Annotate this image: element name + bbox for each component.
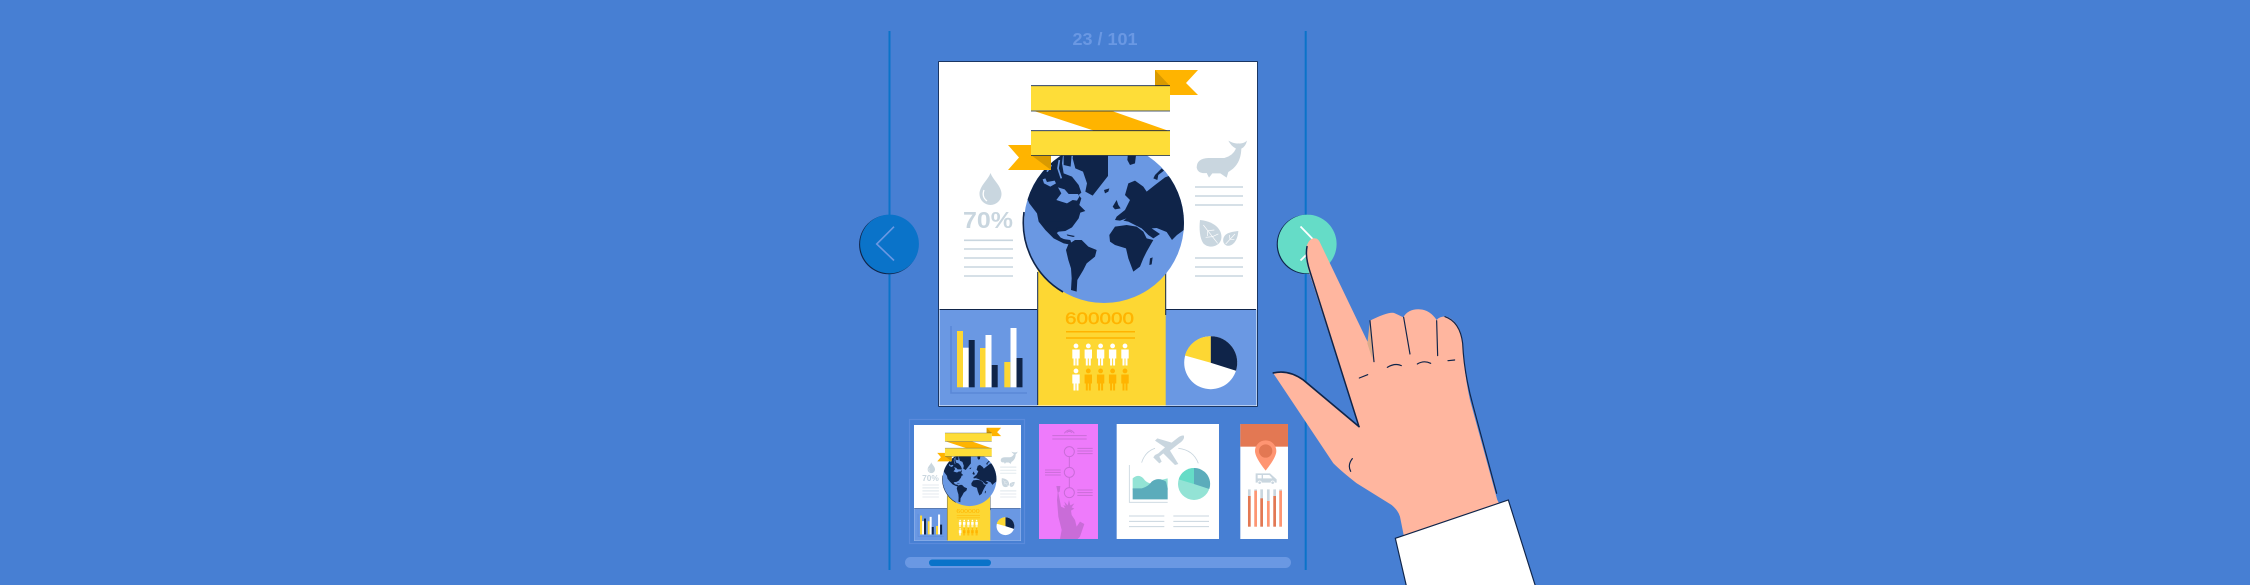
icon: airplane — [1153, 436, 1184, 465]
timeline — [1045, 430, 1093, 498]
icon: whale — [1197, 141, 1247, 178]
icon: map pin — [1255, 440, 1276, 471]
ribbon tail bottom — [1008, 145, 1051, 170]
ribbon band top — [1031, 86, 1170, 110]
left gallery rail — [888, 31, 890, 570]
icon: globe — [1022, 143, 1190, 303]
bar chart — [951, 326, 1027, 393]
south america and africa — [1042, 222, 1153, 292]
flight arcs and axes — [1129, 448, 1198, 502]
thumbnail 2: pink infographic — [1039, 424, 1098, 539]
main card frame — [939, 62, 1257, 406]
button: previous — [859, 215, 919, 274]
panel: yellow column — [1038, 265, 1166, 406]
area chart — [1133, 476, 1168, 499]
right text lines upper — [1195, 187, 1243, 205]
icon: water drop — [980, 173, 1002, 205]
icon: leaves — [1200, 220, 1238, 247]
ribbon edge lines — [1031, 86, 1170, 156]
right gallery rail — [1305, 31, 1307, 570]
eurasia — [1104, 150, 1190, 240]
orange header — [1240, 424, 1288, 447]
thumbnail stat 600000: 600000 — [956, 509, 980, 515]
thumbnail 1 frame — [910, 420, 1024, 544]
finger fold shadow — [1367, 321, 1373, 360]
ribbon band bottom — [1031, 131, 1170, 156]
panel: blue bottom band — [940, 310, 1256, 406]
pie chart — [1184, 336, 1237, 389]
pictogram people — [1072, 344, 1129, 390]
right text lines lower — [1195, 258, 1243, 276]
thumbnail 4: location infographic — [1240, 424, 1288, 539]
panel: white card background — [939, 62, 1257, 406]
stat: 70%: 70% — [963, 207, 1013, 233]
illustration: infographic gallery viewer — [859, 31, 1536, 585]
ribbon fold top — [1155, 70, 1170, 86]
ribbon fold bottom — [1031, 155, 1051, 170]
hand pointing at next button — [1273, 238, 1537, 585]
bar chart — [1248, 489, 1282, 527]
main infographic artwork — [939, 62, 1257, 406]
stat: 600000: 600000 — [1065, 309, 1134, 328]
divider lines under number — [1066, 332, 1135, 338]
ribbon tail top — [1155, 70, 1198, 95]
north america and greenland — [1022, 150, 1108, 245]
scrollbar handle — [929, 560, 991, 566]
column edges — [940, 272, 1256, 405]
ribbon middle twist — [1034, 111, 1169, 131]
left text lines — [964, 240, 1013, 276]
thumbnail 1: globe infographic — [914, 425, 1021, 541]
page counter: 23 / 101 — [1072, 29, 1138, 49]
thumbnail stat 70%: 70% — [922, 474, 939, 483]
hand shape — [1273, 238, 1508, 537]
icon: van — [1256, 473, 1277, 484]
text lines — [1129, 516, 1209, 527]
shirt cuff — [1395, 500, 1537, 585]
statue silhouette — [1056, 486, 1084, 539]
ribbon banner — [1008, 70, 1198, 170]
continents — [1022, 150, 1190, 292]
hand outlines — [1273, 247, 1497, 493]
button: next — [1277, 215, 1337, 274]
pie chart — [1178, 468, 1210, 500]
thumbnail 3: travel infographic — [1117, 424, 1219, 539]
scrollbar track — [905, 557, 1291, 568]
